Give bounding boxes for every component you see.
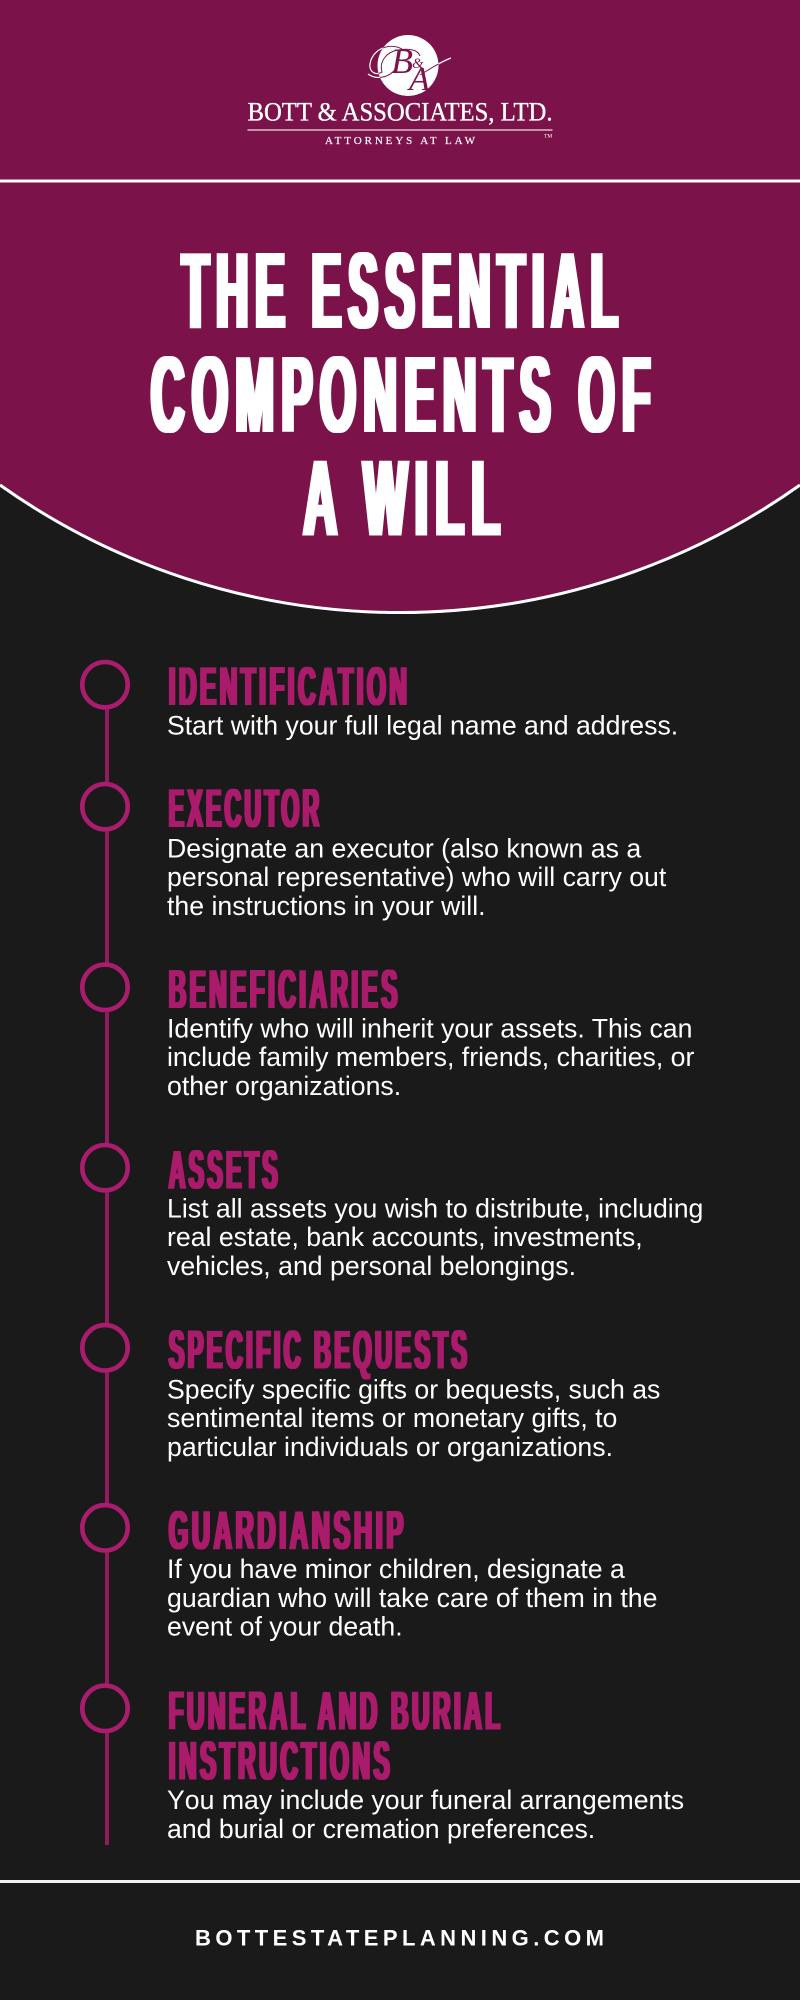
timeline item: Beneficiaries: BENEFICIARIES [169,958,401,1020]
timeline item: Executor: EXECUTOR [169,777,322,839]
timeline item: Beneficiaries: other organizations. [167,1071,401,1101]
title [151,231,658,560]
timeline item: Guardianship: event of your death. [167,1612,403,1642]
timeline item: Guardianship: GUARDIANSHIP [169,1499,407,1561]
timeline item: Identification: Start with your full legal name and address. [167,711,678,741]
timeline item: Assets: vehicles, and personal belongings. [167,1251,576,1281]
logo: Bott & Associates: TM [544,134,552,140]
timeline item: Guardianship: guardian who will take care of them in the [167,1583,657,1613]
company name: BOTT & ASSOCIATES, LTD. [248,98,552,127]
timeline item: Specific Bequests: sentimental items or monetary gifts, to [167,1403,617,1433]
timeline item: Funeral and Burial Instructions: INSTRUCTIONS [169,1729,393,1791]
title: A WILL [304,439,508,560]
icon: B&A monogram [368,35,451,98]
tagline: ATTORNEYS AT LAW [325,135,476,147]
header banner with curved bottom [0,0,800,613]
timeline item: Funeral and Burial Instructions: You may include your funeral arrangements [167,1785,684,1815]
timeline item: Assets [82,1138,703,1323]
icon: B&A monogram: & [412,56,424,72]
timeline item: Specific Bequests: Specify specific gifts or bequests, such as [167,1374,660,1404]
timeline item: Beneficiaries: Identify who will inherit your assets. This can [167,1013,692,1043]
timeline item: Identification: IDENTIFICATION [169,655,410,717]
website: BOTTESTATEPLANNING.COM [195,1926,604,1951]
icon: B&A monogram: A [407,61,430,98]
footer [0,1880,800,1951]
timeline item: Executor: personal representative) who will carry out [167,862,667,892]
timeline item: Assets: List all assets you wish to distribute, including [167,1193,703,1223]
timeline item: Guardianship [82,1499,657,1684]
logo: Bott & Associates [248,35,552,147]
timeline item: Funeral and Burial Instructions [82,1679,684,1845]
icon: B&A monogram: B [391,41,413,81]
timeline item: Specific Bequests: particular individuals or organizations. [167,1432,613,1462]
timeline item: Executor: Designate an executor (also known as a [167,833,641,863]
timeline item: Executor [82,777,667,963]
timeline item: Funeral and Burial Instructions: and burial or cremation preferences. [167,1814,595,1844]
timeline item: Guardianship: If you have minor children, designate a [167,1554,625,1584]
timeline item: Assets: ASSETS [169,1138,281,1200]
timeline item: Identification [82,655,678,782]
timeline item: Beneficiaries: include family members, friends, charities, or [167,1042,695,1072]
timeline item: Assets: real estate, bank accounts, investments, [167,1222,643,1252]
timeline item: Specific Bequests [82,1318,660,1503]
timeline item: Executor: the instructions in your will. [167,891,486,921]
timeline item: Beneficiaries [82,958,695,1143]
